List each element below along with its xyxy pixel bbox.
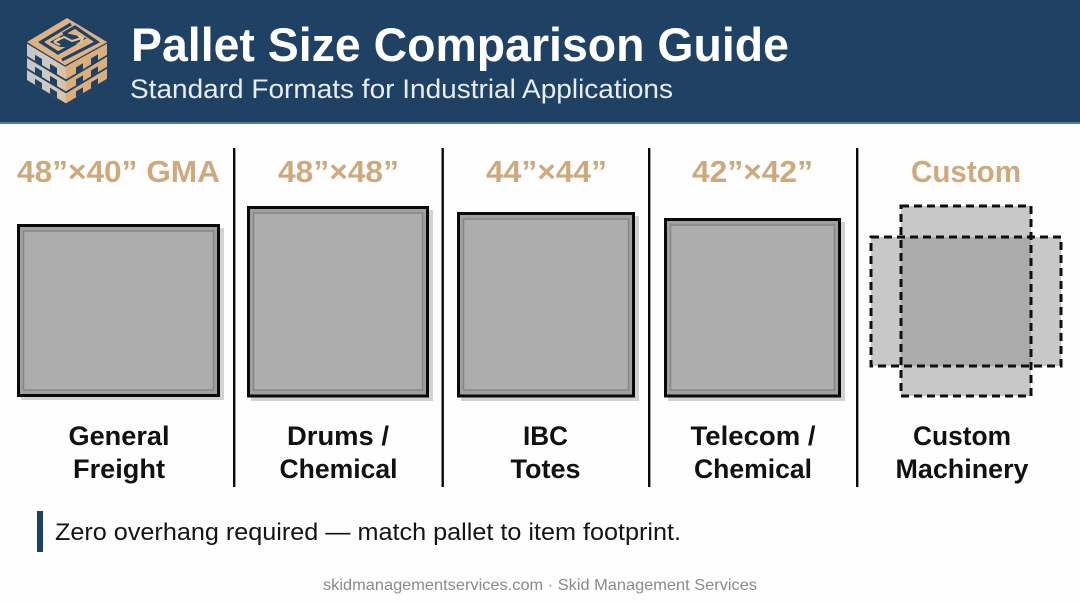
use case label: IBC	[523, 421, 568, 451]
footer: skidmanagementservices.com · Skid Management Services	[323, 577, 757, 594]
subtitle: Standard Formats for Industrial Applications	[130, 74, 673, 104]
panel: 44x44	[458, 154, 639, 484]
use case label	[896, 421, 1028, 484]
size heading: 44”×44”	[486, 154, 607, 189]
pallet footprint square	[666, 220, 845, 401]
panel: custom	[871, 154, 1061, 484]
callout: Zero overhang required — match pallet to item footprint.	[55, 519, 681, 546]
use case label: Custom	[913, 421, 1011, 451]
custom dashed footprint	[871, 206, 1061, 396]
use case label: Chemical	[280, 454, 398, 484]
pallet footprint square	[458, 214, 639, 401]
use case label	[690, 421, 816, 484]
use case label: Drums /	[287, 421, 389, 451]
pallet footprint square	[18, 226, 224, 400]
use case label: Telecom /	[690, 421, 816, 451]
size heading: 48”×48”	[278, 154, 399, 189]
panel: 42x42	[666, 154, 845, 484]
use case label	[68, 421, 170, 484]
pallet footprint square	[248, 208, 433, 401]
title: Pallet Size Comparison Guide	[131, 18, 789, 71]
panel: 48x40 GMA	[17, 154, 224, 484]
use case label: Machinery	[896, 454, 1028, 484]
panel: 48x48	[248, 154, 433, 484]
use case label: Chemical	[694, 454, 812, 484]
use case label	[510, 421, 580, 484]
use case label: Totes	[510, 454, 580, 484]
header band	[0, 0, 1080, 124]
use case label	[280, 421, 398, 484]
column dividers	[233, 148, 858, 487]
icon: pallet logo	[27, 18, 107, 103]
use case label: General	[68, 421, 170, 451]
size heading: 48”×40” GMA	[17, 154, 220, 189]
size heading: 42”×42”	[692, 154, 813, 189]
callout	[37, 511, 681, 552]
size heading: Custom	[911, 154, 1021, 189]
use case label: Freight	[73, 454, 165, 484]
